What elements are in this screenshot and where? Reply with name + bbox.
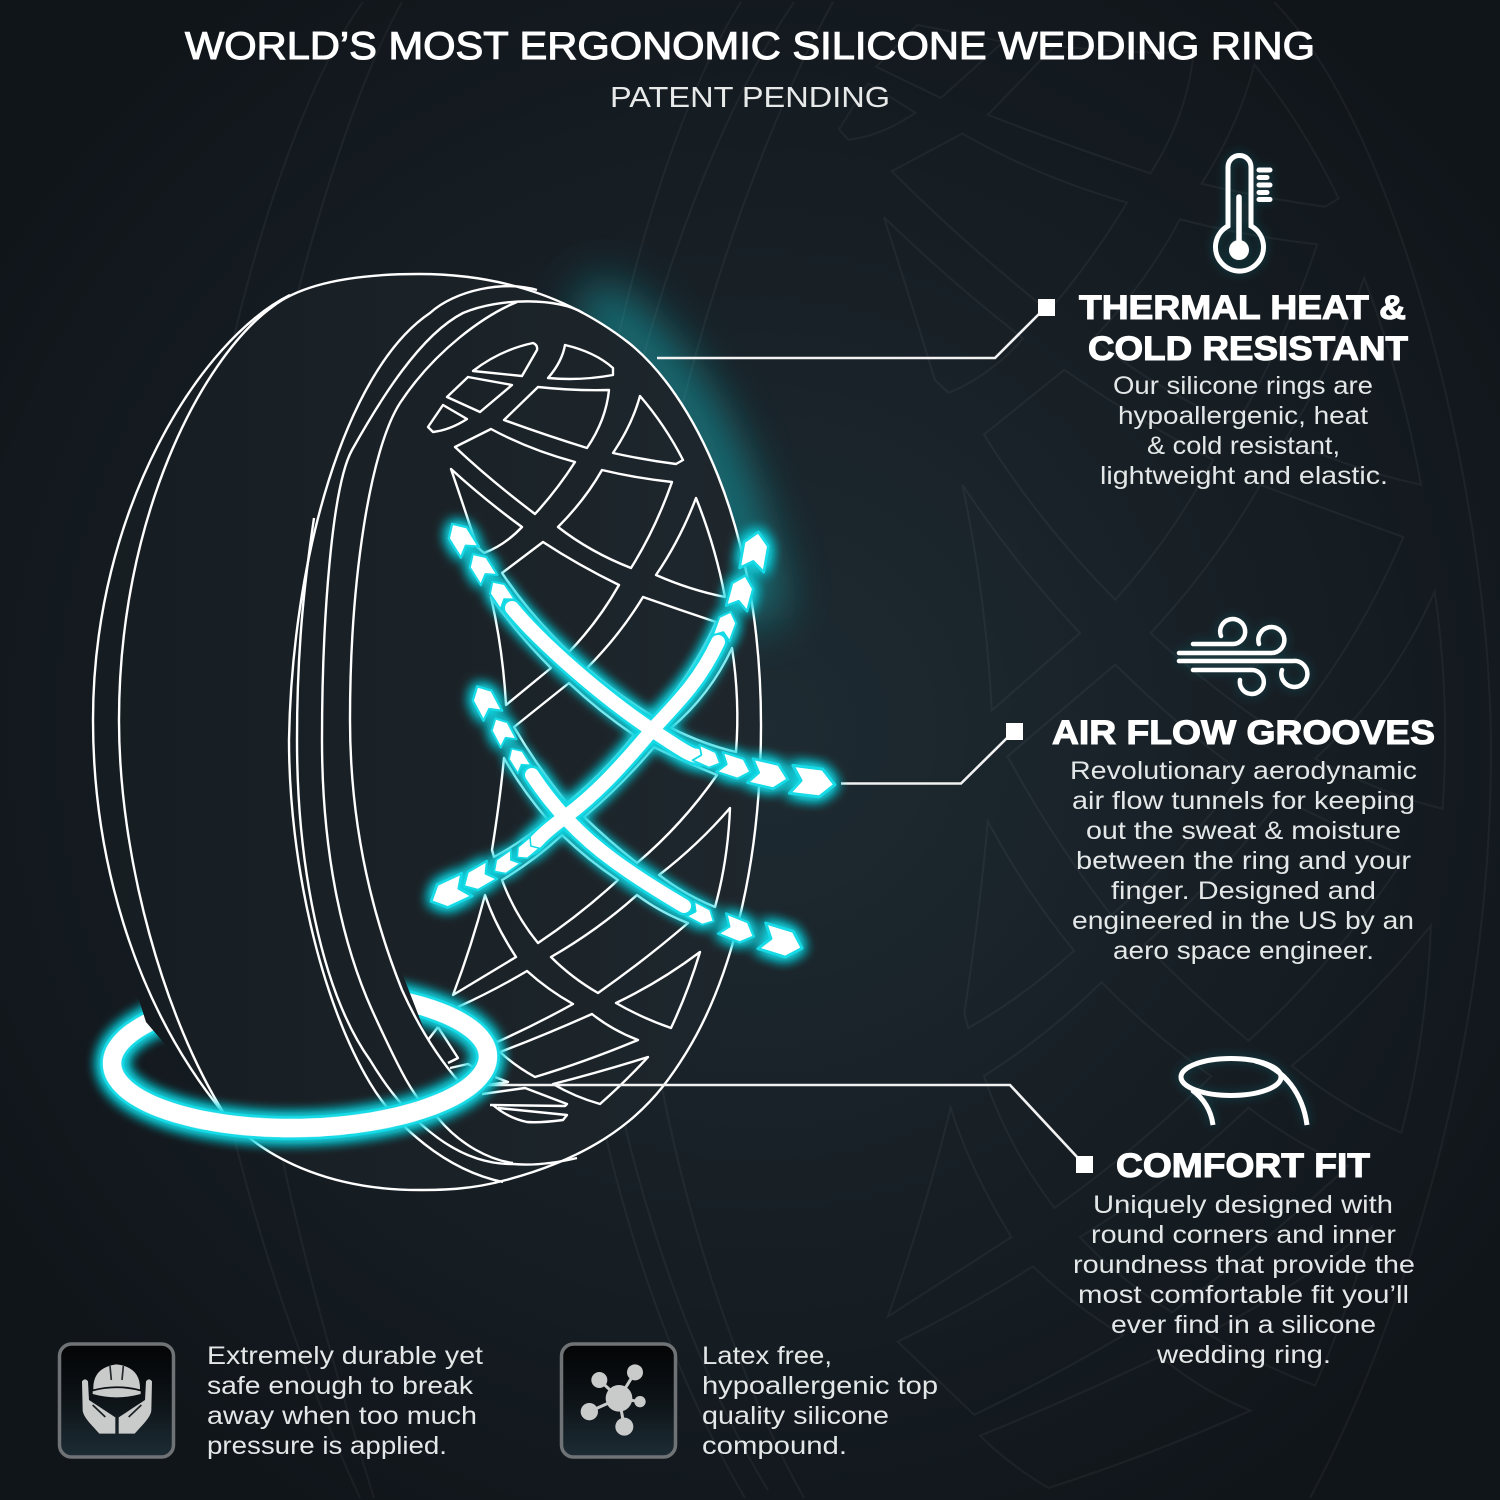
heading: air flow: AIR FLOW GROOVES xyxy=(1052,714,1435,752)
leader marker: air flow xyxy=(1006,723,1023,740)
text: silicone: compound. xyxy=(702,1432,847,1460)
text: air flow: engineered in the US by an xyxy=(1072,907,1414,935)
text: air flow: out the sweat & moisture xyxy=(1086,817,1401,845)
leader line: thermal xyxy=(657,311,1042,358)
ring groove panels xyxy=(428,343,737,1122)
glowing ring highlight xyxy=(111,988,489,1132)
icon box: durable xyxy=(60,1344,174,1457)
text: air flow: Revolutionary aerodynamic xyxy=(1070,757,1417,785)
text: silicone: hypoallergenic top xyxy=(702,1372,938,1400)
heading: thermal: THERMAL HEAT & xyxy=(1079,289,1406,327)
air flow arrows xyxy=(426,518,837,961)
heading: comfort fit: COMFORT FIT xyxy=(1116,1147,1370,1185)
leader line: comfort fit xyxy=(487,1085,1078,1158)
ring body xyxy=(93,274,761,1190)
text: silicone xyxy=(702,1342,938,1460)
text: air flow: aero space engineer. xyxy=(1113,937,1374,965)
text: comfort fit: wedding ring. xyxy=(1156,1341,1331,1369)
text: thermal: lightweight and elastic. xyxy=(1100,462,1388,490)
heading: thermal: COLD RESISTANT xyxy=(1088,330,1408,368)
title: WORLD’S MOST ERGONOMIC SILICONE WEDDING RING xyxy=(185,25,1315,68)
text: comfort fit: ever find in a silicone xyxy=(1111,1311,1376,1339)
text: durable: safe enough to break xyxy=(207,1372,474,1400)
text: comfort fit xyxy=(1073,1191,1415,1369)
ring outlines xyxy=(93,274,761,1190)
text: comfort fit: Uniquely designed with xyxy=(1093,1191,1393,1219)
text: silicone: Latex free, xyxy=(702,1342,832,1370)
text: comfort fit: most comfortable fit you’ll xyxy=(1078,1281,1409,1309)
text: durable: pressure is applied. xyxy=(207,1432,447,1460)
icon: hard hat and hands xyxy=(82,1364,152,1434)
text: durable xyxy=(207,1342,483,1460)
text: air flow: between the ring and your xyxy=(1076,847,1411,875)
text: air flow xyxy=(1070,757,1417,965)
icon box: silicone xyxy=(562,1344,676,1457)
text: air flow: finger. Designed and xyxy=(1111,877,1376,905)
arrow chevrons xyxy=(426,518,837,961)
icon: ring comfort xyxy=(1181,1058,1307,1125)
text: thermal xyxy=(1100,372,1388,490)
subtitle: PATENT PENDING xyxy=(610,82,890,114)
icon: wind xyxy=(1179,619,1307,694)
leader line: air flow xyxy=(841,737,1008,784)
heading: thermal xyxy=(1079,289,1408,368)
icon: thermometer xyxy=(1216,156,1270,271)
text: silicone: quality silicone xyxy=(702,1402,889,1430)
text: durable: away when too much xyxy=(207,1402,477,1430)
leader marker: comfort fit xyxy=(1076,1156,1093,1173)
text: thermal: Our silicone rings are xyxy=(1113,372,1373,400)
text: comfort fit: roundness that provide the xyxy=(1073,1251,1415,1279)
icon: molecule xyxy=(581,1364,646,1436)
arc curves, cyan edge xyxy=(512,608,718,906)
arc curves, white core xyxy=(512,608,718,906)
ring illustration xyxy=(93,274,761,1190)
text: comfort fit: round corners and inner xyxy=(1091,1221,1396,1249)
text: thermal: & cold resistant, xyxy=(1147,432,1340,460)
leader marker: thermal xyxy=(1038,299,1055,316)
text: durable: Extremely durable yet xyxy=(207,1342,483,1370)
text: thermal: hypoallergenic, heat xyxy=(1118,402,1368,430)
text: air flow: air flow tunnels for keeping xyxy=(1072,787,1415,815)
teal glow behind ring xyxy=(585,300,758,620)
